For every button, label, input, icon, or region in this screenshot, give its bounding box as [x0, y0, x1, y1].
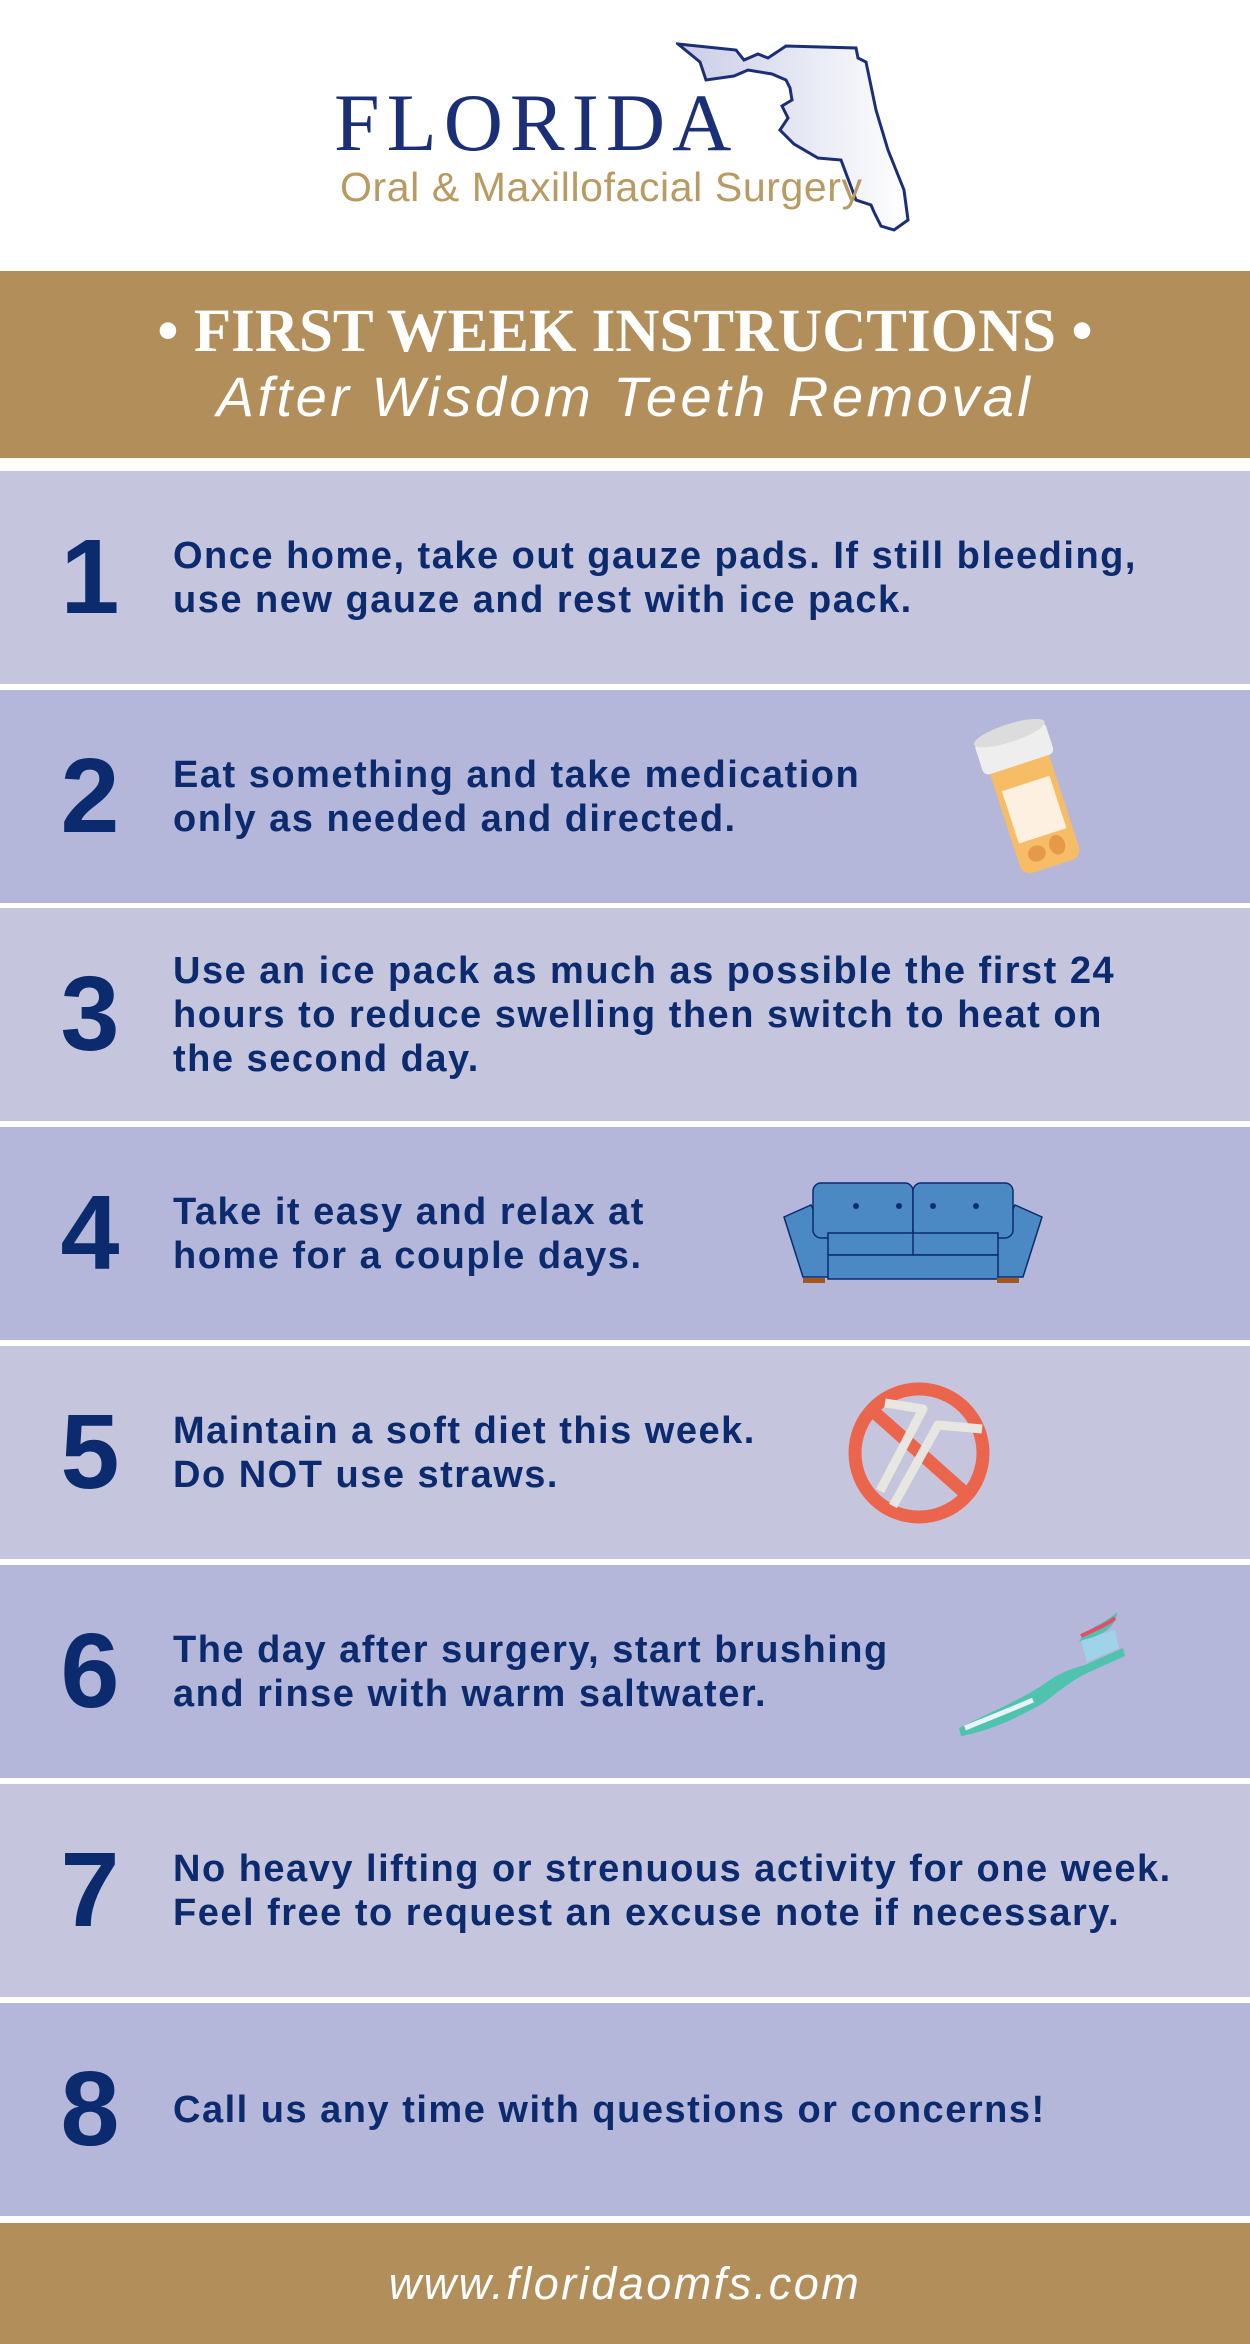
step 5: Do NOT use straws.: [173, 1454, 559, 1496]
step 6: 6: [61, 1612, 119, 1730]
step 7: 7: [61, 1831, 119, 1949]
step 4: Take it easy and relax at: [173, 1190, 645, 1232]
step 8: 8: [61, 2050, 119, 2168]
step 6: The day after surgery, start brushing: [173, 1628, 889, 1670]
step 5: [0, 1346, 1250, 1559]
title band: [0, 271, 1250, 458]
step 7: No heavy lifting or strenuous activity for one week.: [173, 1848, 1172, 1890]
step 3: Use an ice pack as much as possible the first 24: [173, 950, 1115, 992]
step 5: 5: [61, 1393, 119, 1511]
subtitle: After Wisdom Teeth Removal: [217, 365, 1033, 428]
step 4: [0, 1127, 1250, 1340]
step 2: only as needed and directed.: [173, 798, 737, 840]
icon: couch: [783, 1182, 1043, 1283]
step 3: hours to reduce swelling then switch to heat on: [173, 994, 1103, 1036]
step 1: use new gauze and rest with ice pack.: [173, 578, 913, 620]
icon: pill bottle: [974, 718, 1080, 874]
step 1: Once home, take out gauze pads. If still bleeding,: [173, 534, 1137, 576]
step 5: Maintain a soft diet this week.: [173, 1410, 756, 1452]
step 3: 3: [61, 955, 119, 1073]
logo subtitle: Oral & Maxillofacial Surgery: [340, 164, 863, 210]
step 2: Eat something and take medication: [173, 754, 860, 796]
step 7: [0, 1784, 1250, 1997]
step 1: [0, 471, 1250, 684]
footer: [0, 2223, 1250, 2344]
icon: florida face outline: [676, 42, 910, 232]
icon: no straws: [848, 1382, 990, 1524]
step 1: 1: [61, 518, 119, 636]
step 7: Feel free to request an excuse note if necessary.: [173, 1892, 1120, 1934]
step 4: home for a couple days.: [173, 1234, 642, 1276]
step 4: 4: [61, 1174, 119, 1292]
step 2: [0, 690, 1250, 903]
logo text FLORIDA: FLORIDA: [334, 77, 738, 168]
step 2: 2: [61, 737, 119, 855]
step 8: Call us any time with questions or concerns!: [173, 2088, 1046, 2130]
step 8: [0, 2003, 1250, 2216]
footer: www.floridaomfs.com: [389, 2258, 861, 2309]
step 6: [0, 1565, 1250, 1778]
icon: toothbrush: [959, 1612, 1125, 1736]
step 3: the second day.: [173, 1038, 480, 1080]
step 6: and rinse with warm saltwater.: [173, 1672, 767, 1714]
title: • FIRST WEEK INSTRUCTIONS •: [157, 298, 1093, 365]
header logo: [334, 42, 910, 232]
step 3: [0, 908, 1250, 1121]
